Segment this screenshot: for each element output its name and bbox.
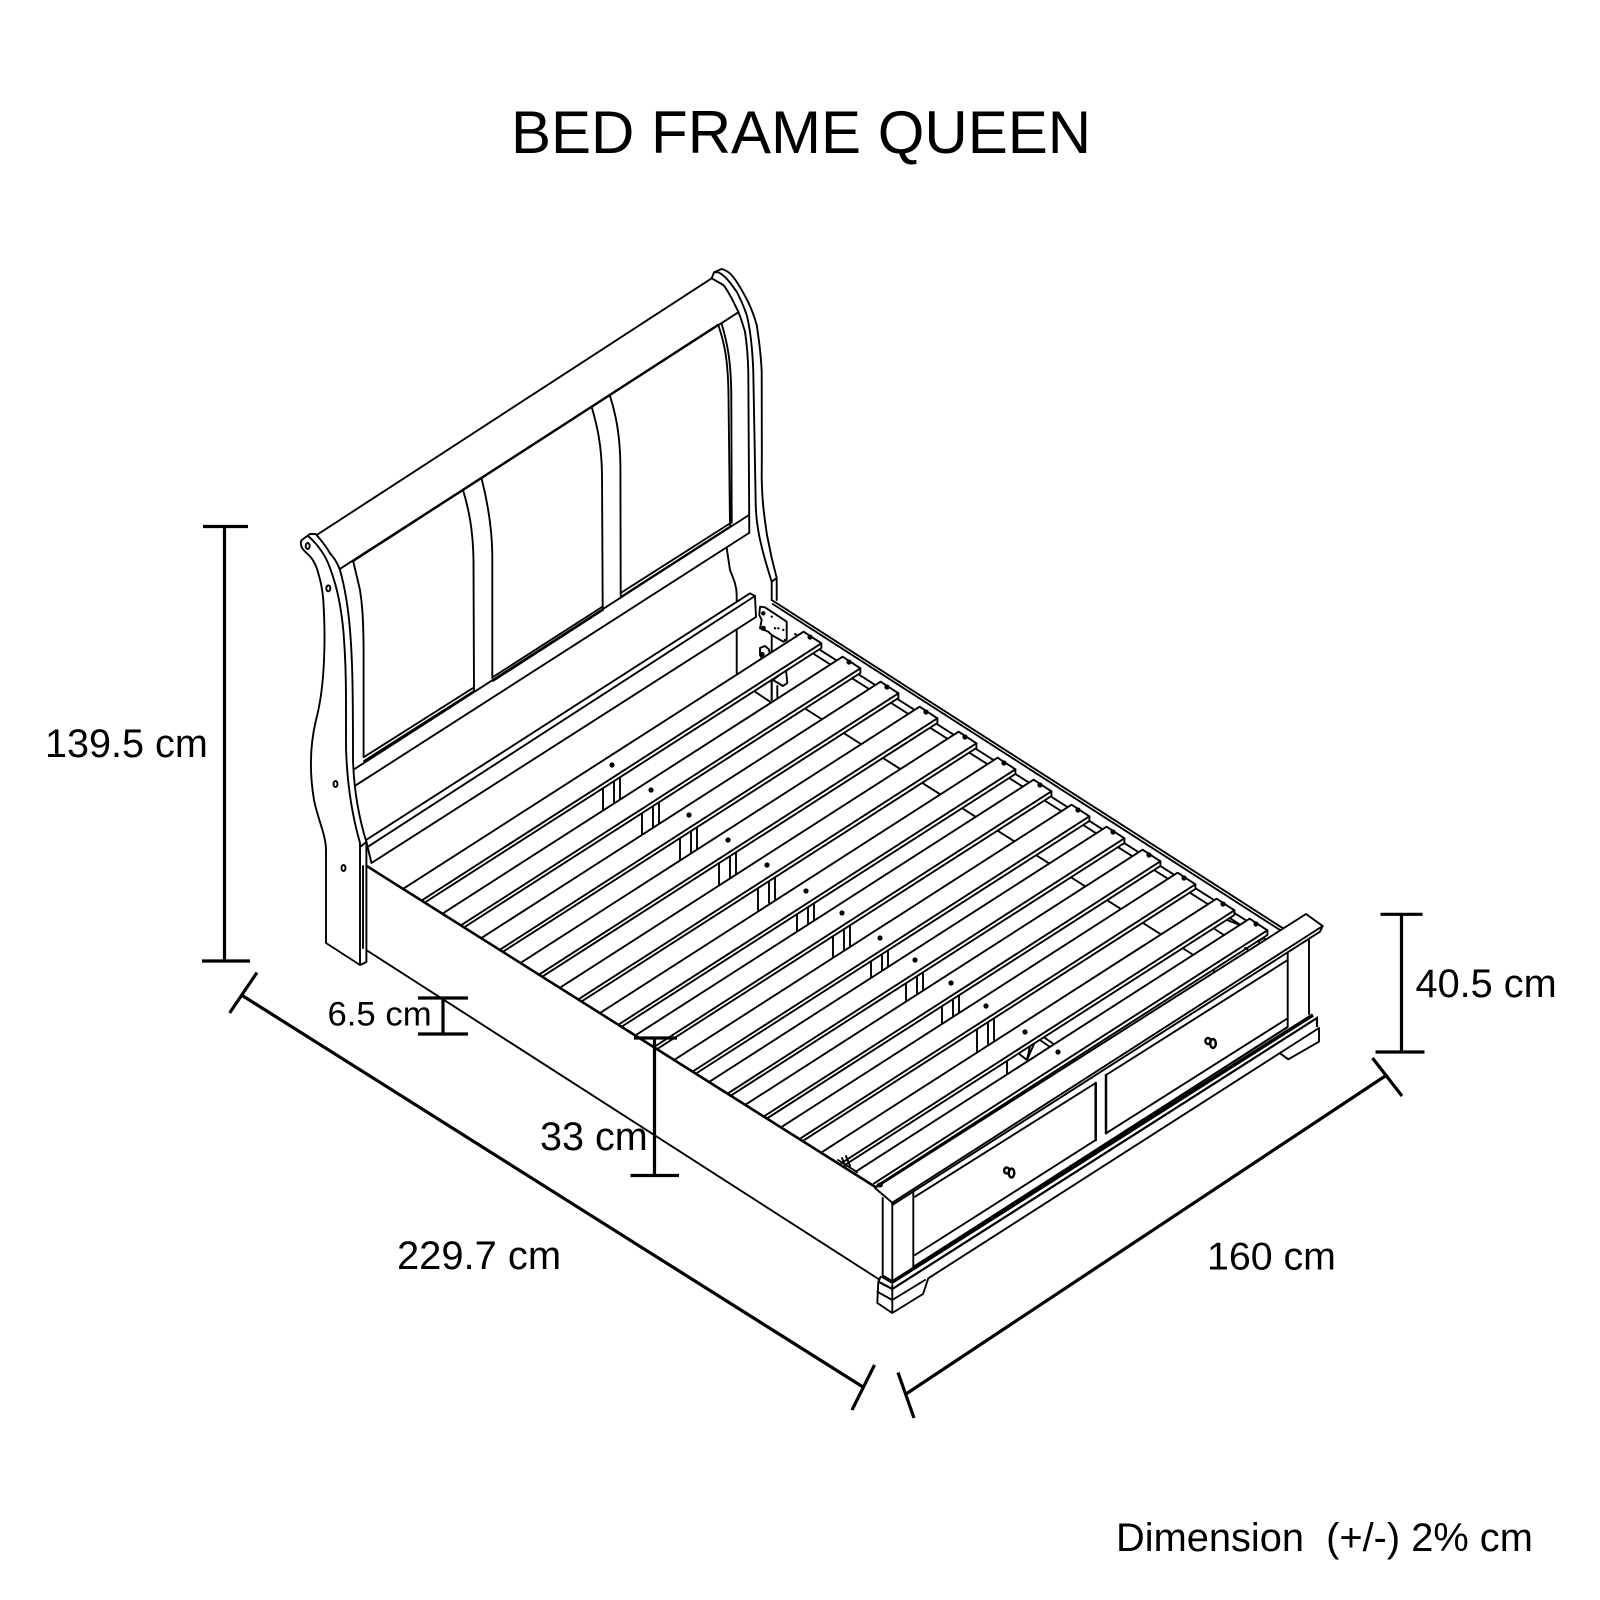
footboard plinth and feet [877, 1015, 1319, 1313]
dimension: headboard height [45, 526, 250, 961]
dimension: length [230, 972, 875, 1410]
headboard mullion one [463, 479, 492, 691]
tolerance note: Dimension (+/-) 2% cm [1116, 1516, 1533, 1560]
far side rail lines [772, 600, 1283, 938]
dimension: width [898, 1058, 1402, 1418]
dimension: rail thickness: 6.5 cm [328, 996, 432, 1034]
drawer knobs [1004, 1038, 1216, 1177]
dimension: bed height: 33 cm [540, 1115, 648, 1159]
footboard posts [883, 937, 1309, 1281]
headboard panel edges [364, 524, 731, 761]
centre support line [755, 692, 1240, 956]
headboard right post [712, 269, 777, 700]
headboard mullion two [592, 396, 621, 608]
dimension: length: 229.7 cm [397, 1234, 561, 1278]
post bolt holes [306, 543, 346, 871]
head slat board [366, 593, 756, 863]
side rail [360, 864, 883, 1280]
dimension: bed height [540, 1038, 679, 1176]
drawer fronts [915, 960, 1288, 1255]
footboard backing [876, 914, 1323, 1313]
dimension: headboard height: 139.5 cm [45, 722, 208, 766]
bed slats [382, 632, 1267, 1217]
headboard right panel edge [718, 324, 732, 525]
title: BED FRAME QUEEN [511, 99, 1091, 166]
headboard lower rail [353, 515, 749, 787]
slat hardware marks [838, 938, 1268, 1178]
footboard [875, 914, 1323, 1313]
headboard [317, 269, 777, 787]
dimension: width: 160 cm [1207, 1234, 1336, 1278]
bed frame drawing [301, 269, 1323, 1313]
headboard top rail [317, 278, 738, 569]
dimension: footboard height: 40.5 cm [1416, 962, 1557, 1006]
footboard top board [875, 914, 1323, 1205]
support posts between slats [603, 774, 1055, 1074]
left post [301, 534, 366, 965]
rear curve behind rail [727, 548, 737, 673]
bracket under first slat [772, 670, 787, 700]
hinge plate [759, 607, 787, 660]
dimension: footboard height [1376, 914, 1557, 1052]
far side rail and underframe [603, 600, 1283, 1074]
